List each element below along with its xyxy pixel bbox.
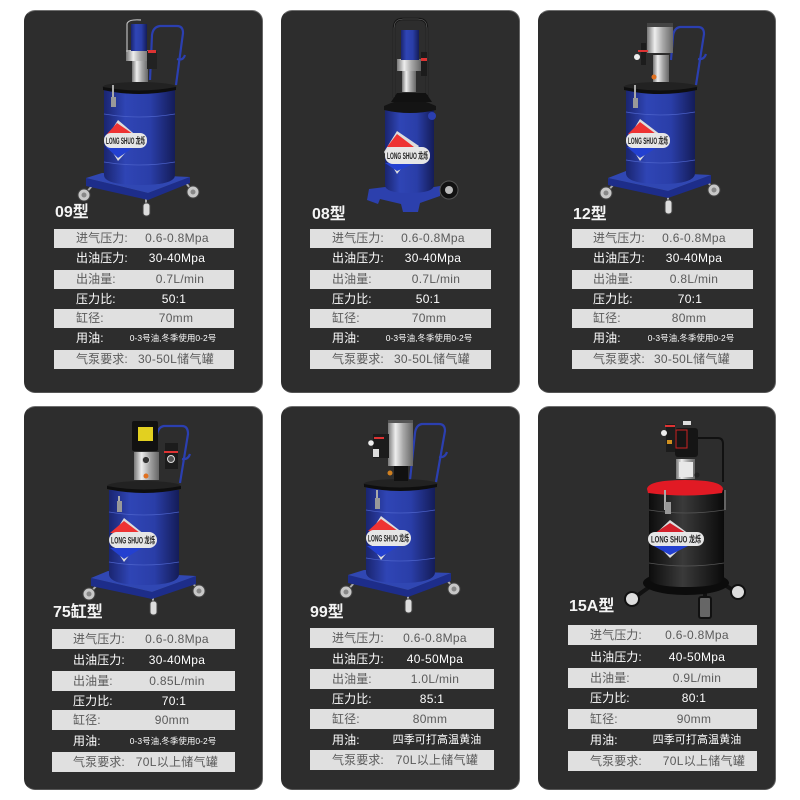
- spec table: 50:1: [162, 292, 186, 306]
- spec table: 出油量:: [332, 272, 372, 286]
- spec table: 进气压力:: [593, 231, 645, 245]
- spec table: [572, 229, 753, 369]
- panel: 15A型: [538, 406, 776, 790]
- spec table: 0.6-0.8Mpa: [145, 231, 209, 245]
- spec table: 0.6-0.8Mpa: [403, 631, 467, 645]
- model name: 15A型: [569, 598, 614, 615]
- spec table: 50:1: [416, 292, 440, 306]
- spec table: 出油压力:: [332, 251, 384, 265]
- spec table: 0-3号油,冬季使用0-2号: [648, 333, 734, 343]
- spec table: 0.6-0.8Mpa: [662, 231, 726, 245]
- spec table: 0.8L/min: [670, 272, 718, 286]
- spec table: 出油压力:: [590, 650, 642, 664]
- spec table: 压力比:: [76, 292, 116, 306]
- spec table: 0-3号油,冬季使用0-2号: [386, 333, 472, 343]
- spec table: 出油量:: [590, 671, 630, 685]
- machine: 75缸型 grease pump: [82, 421, 206, 616]
- spec table: 0.7L/min: [412, 272, 460, 286]
- spec table: 缸径:: [593, 311, 621, 325]
- spec table: 气泵要求:: [76, 352, 128, 366]
- machine: 09型 grease pump: [78, 19, 200, 216]
- spec table: 0.6-0.8Mpa: [401, 231, 465, 245]
- model name: 09型: [55, 204, 89, 221]
- spec table: 30-50L储气罐: [394, 352, 470, 366]
- spec table: 出油压力:: [332, 652, 384, 666]
- spec table: 0.9L/min: [673, 671, 721, 685]
- machine: 09型 grease pump: LONG SHUO 龙烁: [106, 134, 144, 146]
- spec table: 70:1: [162, 694, 186, 708]
- machine: 12型 grease pump: [600, 23, 720, 214]
- spec table: 出油压力:: [76, 251, 128, 265]
- spec table: 出油压力:: [593, 251, 645, 265]
- spec table: 40-50Mpa: [407, 652, 463, 666]
- spec table: 30-50L储气罐: [138, 352, 214, 366]
- model name: 08型: [312, 206, 346, 223]
- panel: 08型: [281, 10, 520, 393]
- spec table: 出油量:: [593, 272, 633, 286]
- machine: 08型 grease pump: LONG SHUO 龙烁: [386, 150, 428, 160]
- spec table: 30-40Mpa: [405, 251, 461, 265]
- machine: 15A型 grease pump: LONG SHUO 龙烁: [650, 533, 700, 544]
- spec table: 气泵要求:: [332, 753, 384, 767]
- machine: 75缸型 grease pump: LONG SHUO 龙烁: [110, 534, 154, 545]
- spec table: 出油压力:: [73, 653, 125, 667]
- spec table: 用油:: [590, 733, 618, 747]
- spec table: 用油:: [73, 734, 101, 748]
- spec table: 进气压力:: [332, 631, 384, 645]
- model name: 99型: [310, 604, 344, 621]
- spec table: 0.7L/min: [156, 272, 204, 286]
- spec table: 用油:: [332, 331, 360, 345]
- spec table: 缸径:: [76, 311, 104, 325]
- spec table: 0.85L/min: [149, 674, 205, 688]
- spec table: 进气压力:: [332, 231, 384, 245]
- spec table: 用油:: [593, 331, 621, 345]
- spec table: 30-40Mpa: [149, 653, 205, 667]
- spec table: 缸径:: [590, 712, 618, 726]
- spec table: 气泵要求:: [593, 352, 645, 366]
- machine: 08型 grease pump: [367, 18, 458, 212]
- spec table: 90mm: [677, 712, 711, 726]
- spec table: 70mm: [412, 311, 446, 325]
- spec table: 进气压力:: [590, 628, 642, 642]
- spec table: 压力比:: [593, 292, 633, 306]
- spec table: 压力比:: [332, 292, 372, 306]
- model name: 75缸型: [53, 604, 103, 621]
- spec table: [310, 229, 491, 369]
- panel: 75缸型: [24, 406, 263, 790]
- spec table: 出油量:: [76, 272, 116, 286]
- spec table: 四季可打高温黄油: [653, 734, 741, 746]
- spec table: 0.6-0.8Mpa: [665, 628, 729, 642]
- spec table: 90mm: [155, 713, 189, 727]
- spec table: 出油量:: [332, 672, 372, 686]
- spec table: 压力比:: [332, 692, 372, 706]
- spec table: 压力比:: [590, 691, 630, 705]
- spec table: 30-50L储气罐: [654, 352, 730, 366]
- spec table: 30-40Mpa: [666, 251, 722, 265]
- model name: 12型: [573, 206, 607, 223]
- spec table: 气泵要求:: [73, 755, 125, 769]
- machine: 99型 grease pump: [340, 420, 460, 614]
- spec table: 气泵要求:: [590, 754, 642, 768]
- machine: 99型 grease pump: LONG SHUO 龙烁: [368, 532, 408, 543]
- spec table: [52, 629, 235, 772]
- machine: 15A型 grease pump: [624, 421, 746, 619]
- spec table: 80mm: [672, 311, 706, 325]
- spec table: 压力比:: [73, 694, 113, 708]
- spec table: 进气压力:: [73, 632, 125, 646]
- panel: 12型: [538, 10, 776, 393]
- spec table: 用油:: [332, 733, 360, 747]
- spec table: [568, 625, 757, 771]
- spec table: 0.6-0.8Mpa: [145, 632, 209, 646]
- spec table: 70:1: [678, 292, 702, 306]
- spec table: 70L以上储气罐: [396, 753, 478, 767]
- spec table: 70L以上储气罐: [136, 755, 218, 769]
- spec table: 0-3号油,冬季使用0-2号: [130, 333, 216, 343]
- spec table: 85:1: [420, 692, 444, 706]
- panel: 09型: [24, 10, 263, 393]
- spec table: 80:1: [682, 691, 706, 705]
- spec table: 80mm: [413, 712, 447, 726]
- spec table: 四季可打高温黄油: [393, 734, 481, 746]
- spec table: 进气压力:: [76, 231, 128, 245]
- spec table: 70L以上储气罐: [663, 754, 745, 768]
- spec table: 气泵要求:: [332, 352, 384, 366]
- spec table: 缸径:: [332, 311, 360, 325]
- spec table: 1.0L/min: [411, 672, 459, 686]
- spec table: 70mm: [159, 311, 193, 325]
- spec table: [310, 628, 494, 770]
- panel: 99型: [281, 406, 520, 790]
- spec table: 出油量:: [73, 674, 113, 688]
- spec table: 0-3号油,冬季使用0-2号: [130, 736, 216, 746]
- spec table: 缸径:: [73, 713, 101, 727]
- spec table: 缸径:: [332, 712, 360, 726]
- spec table: 30-40Mpa: [149, 251, 205, 265]
- machine: 12型 grease pump: LONG SHUO 龙烁: [628, 134, 668, 146]
- spec table: 40-50Mpa: [669, 650, 725, 664]
- spec table: 用油:: [76, 331, 104, 345]
- spec table: [54, 229, 234, 369]
